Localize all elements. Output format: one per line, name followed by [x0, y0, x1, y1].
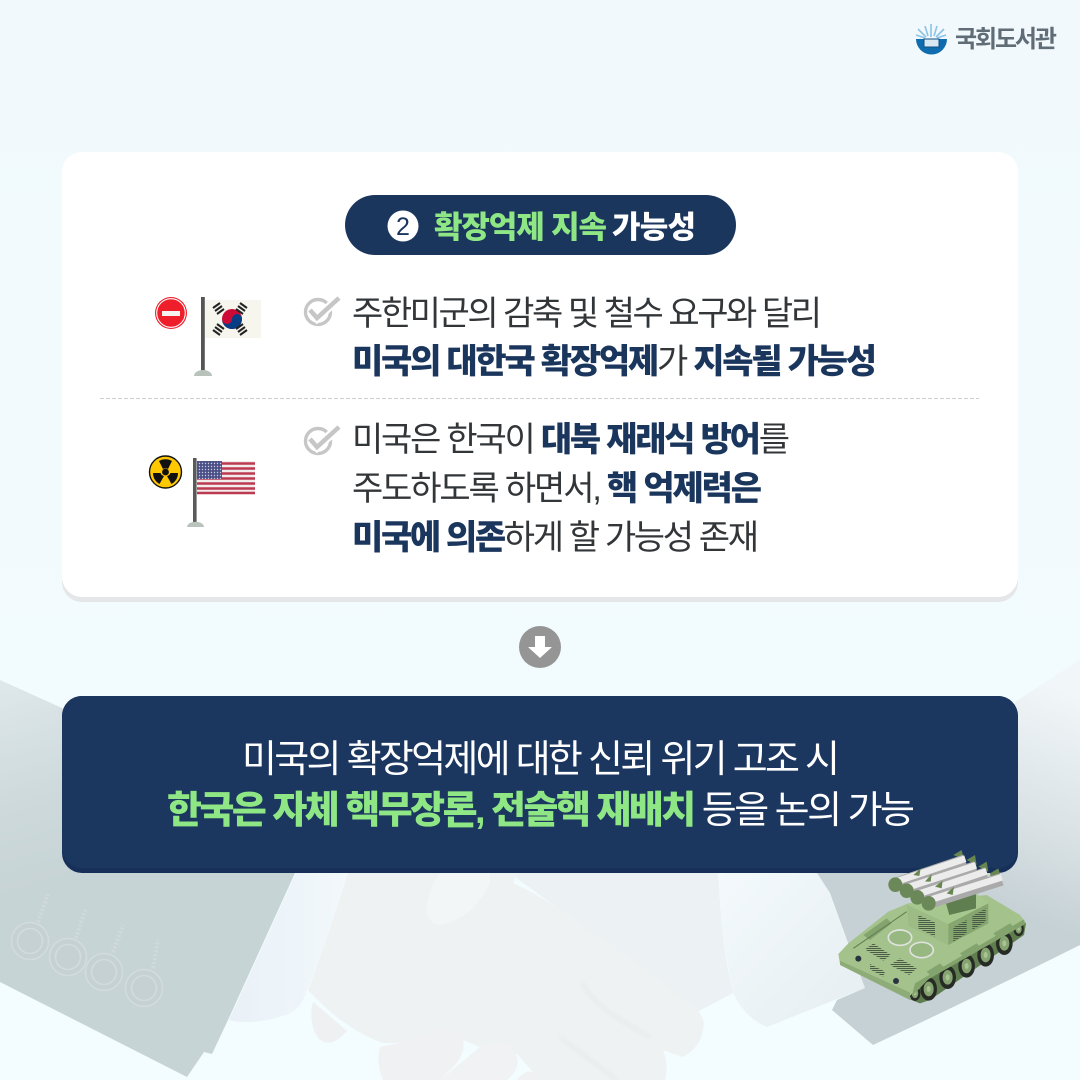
icon: no-entry sign — [155, 297, 187, 329]
row: United States — [150, 421, 790, 557]
number badge — [388, 210, 418, 242]
conclusion text — [167, 739, 915, 832]
hand shading creases — [560, 983, 650, 1080]
icon: check mark — [306, 298, 339, 324]
small finger left — [311, 1002, 347, 1043]
panel: extended deterrence — [62, 152, 1018, 602]
row text: 주도하도록 하면서, 핵 억제력은 — [352, 470, 762, 508]
turret — [907, 894, 988, 924]
icon: check mark — [306, 427, 339, 454]
icon: down arrow — [519, 626, 561, 668]
left jacket sleeve — [0, 680, 300, 1077]
missiles — [888, 850, 1002, 911]
heading text: 가능성 — [612, 210, 696, 245]
row text: 주한미군의 감축 및 철수 요구와 달리 — [352, 295, 822, 333]
launcher mount — [946, 892, 976, 915]
card body — [62, 152, 1018, 597]
row text — [352, 295, 877, 381]
card shadow — [62, 157, 1018, 602]
rear hand — [510, 873, 733, 1012]
heading pill — [345, 195, 736, 255]
conclusion text: 한국은 자체 핵무장론, 전술핵 재배치 등을 논의 가능 — [167, 790, 915, 832]
tank hull — [838, 895, 1024, 996]
background: handshake photo — [0, 660, 1080, 1080]
row text: 미국에 의존하게 할 가능성 존재 — [352, 519, 759, 557]
panel: conclusion — [62, 696, 1018, 873]
icon: South Korean flag — [194, 297, 261, 376]
icon: radiation sign — [150, 456, 182, 488]
headlights — [855, 956, 861, 962]
row text: 미국의 대한국 확장억제가 지속될 가능성 — [352, 343, 877, 381]
heading text: 확장억제 지속 — [434, 210, 607, 245]
thumb — [426, 873, 490, 925]
number badge: 2 — [396, 213, 410, 241]
icon: missile tank — [838, 850, 1026, 1003]
tank chassis — [910, 918, 1026, 1003]
row divider — [100, 398, 979, 400]
right jacket sleeve — [817, 660, 1080, 1045]
icon: American flag — [187, 458, 255, 527]
row text: 미국은 한국이 대북 재래식 방어를 — [352, 421, 790, 459]
jacket sleeve buttons — [12, 894, 162, 1006]
row: Korea — [155, 295, 877, 381]
round hatches — [888, 930, 912, 945]
heading text — [434, 210, 696, 245]
camouflage — [863, 918, 1015, 977]
logo: National Assembly Library — [916, 24, 1057, 54]
conclusion text: 미국의 확장억제에 대한 신뢰 위기 고조 시 — [242, 739, 840, 781]
hull vents — [865, 943, 917, 977]
left shirt cuff — [229, 873, 348, 1022]
lower fingers — [379, 1029, 464, 1080]
front hand — [308, 873, 704, 1080]
tank wheels — [910, 922, 1024, 1001]
row text — [352, 421, 790, 557]
logo wordmark: 국회도서관 — [955, 26, 1057, 53]
icon: book and rays — [916, 24, 947, 54]
right shirt cuff — [718, 873, 865, 1027]
